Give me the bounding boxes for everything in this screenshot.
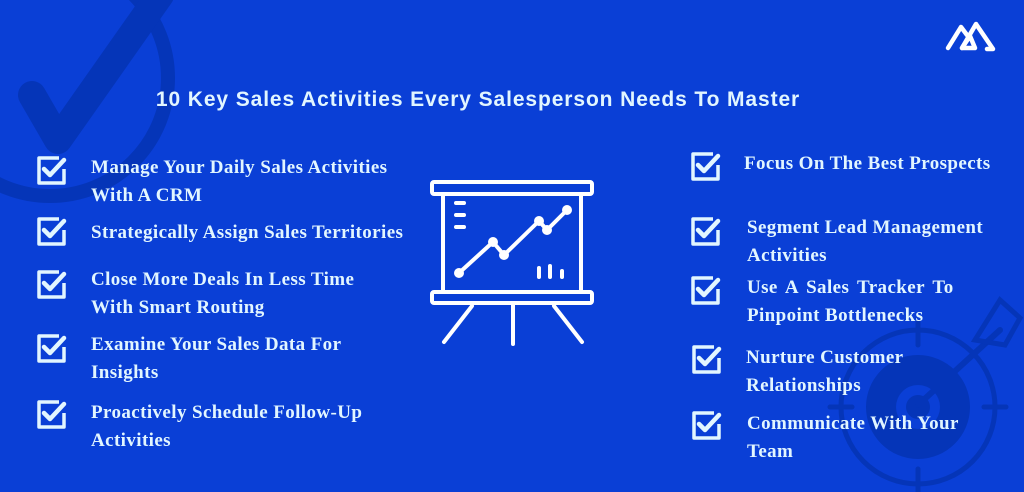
item 1 [37,156,387,206]
panel: left list: Proactively Schedule Follow-Up [91,402,362,423]
panel: right list: Use A Sales Tracker To [747,277,954,298]
panel: left list: With A CRM [91,185,202,206]
panel: left list: Close More Deals In Less Time [91,269,354,290]
panel: left list: Strategically Assign Sales Territories [91,222,403,243]
panel: left list: Manage Your Daily Sales Activities [91,157,387,178]
item 7 [691,217,983,266]
item 8 [691,276,954,326]
item 4 [37,334,341,383]
panel: right list: Communicate With Your [747,413,959,434]
panel: left list: Insights [91,362,159,383]
panel: right list: Nurture Customer [746,347,904,368]
panel: left list: Examine Your Sales Data For [91,334,341,355]
panel: right list: Activities [747,245,827,266]
panel: right list: Pinpoint Bottlenecks [747,305,923,326]
panel: right list: Relationships [746,375,861,396]
panel: left list [37,156,403,451]
panel: right list [691,152,991,462]
title: 10 Key Sales Activities Every Salesperson Needs To Master [156,88,800,111]
panel: left list: With Smart Routing [91,297,265,318]
item 6 [691,152,991,181]
panel: right list: Focus On The Best Prospects [744,153,991,174]
item 3 [37,269,354,318]
logo [946,22,996,52]
item 10 [692,411,959,462]
item 9 [692,345,904,396]
item 5 [37,400,362,451]
panel: right list: Team [747,441,793,462]
panel: right list: Segment Lead Management [747,217,983,238]
icon: presentation board with chart [430,180,594,346]
panel: left list: Activities [91,430,171,451]
item 2 [37,217,403,246]
